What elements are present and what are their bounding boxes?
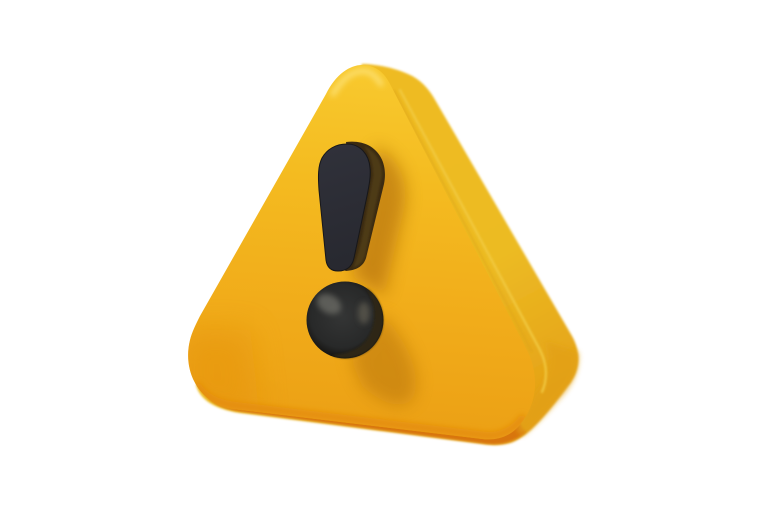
stem front bbox=[318, 144, 370, 271]
triangle front face bbox=[180, 65, 535, 439]
lower-left shading bbox=[188, 320, 246, 396]
exclamation mark dot bbox=[306, 282, 384, 358]
exclamation mark stem bbox=[318, 142, 385, 271]
orange bottom edge bbox=[203, 392, 526, 444]
side darker lower corner bbox=[516, 342, 578, 436]
ball cast shadow bbox=[350, 314, 416, 405]
highlight along side edge bbox=[400, 90, 546, 392]
stem side bbox=[340, 142, 385, 271]
dot highlights bbox=[313, 290, 345, 318]
stem cast shadow bbox=[352, 146, 406, 296]
bottom rim shading bbox=[196, 384, 524, 436]
illustration: 3D yellow warning triangle bbox=[188, 62, 583, 447]
top rim highlight bbox=[333, 71, 381, 94]
triangle body side and thickness bbox=[196, 64, 578, 445]
